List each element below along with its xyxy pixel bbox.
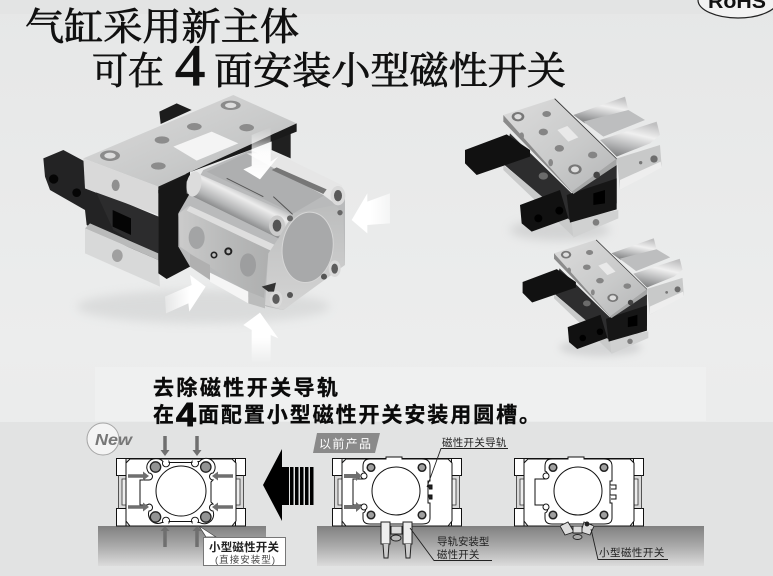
top plate [83, 95, 297, 215]
arrow: bottom [243, 313, 278, 363]
New badge: New [95, 432, 134, 449]
top strip [0, 0, 773, 14]
small switches in groove [560, 522, 594, 540]
black centre block [158, 172, 190, 279]
upper right gripper photo [465, 97, 662, 241]
gray arrows on previous diagrams [344, 471, 544, 512]
callout: small magnetic switch direct mount: (直接安装型) [215, 554, 275, 566]
upper surface [207, 152, 333, 213]
previous product tag [313, 433, 380, 453]
pale heading panel [95, 367, 706, 421]
RoHS badge [698, 0, 773, 18]
title: 可在 [92, 51, 164, 93]
lower plate [85, 223, 160, 287]
title: 4 [175, 33, 205, 98]
label: rail-mounted switch: 磁性开关 [437, 548, 480, 561]
label: rail-mounted switch [410, 528, 492, 561]
arrow: top [243, 127, 278, 179]
label: rail-mounted switch: 导轨安装型 [437, 535, 490, 548]
base silhouette [178, 150, 345, 310]
slot lines [227, 178, 293, 215]
left black jaw [43, 150, 158, 263]
rear black jaw [159, 103, 192, 124]
arrow: right [352, 193, 390, 233]
lower right gripper photo [523, 238, 684, 356]
title [25, 7, 566, 98]
heading text: 面配置小型磁性开关安装用圆槽。 [198, 404, 540, 427]
gray arrows on new diagram [128, 436, 233, 547]
ground blocks [98, 526, 704, 566]
title: 气缸采用新主体 [25, 7, 299, 49]
upper tube [187, 172, 293, 238]
bottom diagram band [0, 422, 773, 576]
previous product diagram: rail-mounted [332, 457, 462, 526]
arrow: lower left [165, 275, 206, 313]
label: small switch: 小型磁性开关 [599, 546, 665, 559]
rear end block [272, 131, 291, 158]
front face [265, 205, 345, 310]
callout: small magnetic switch direct mount [199, 526, 286, 566]
label: switch rail: 磁性开关导轨 [442, 436, 507, 449]
side block [178, 206, 275, 303]
heading text: 4 [176, 396, 197, 433]
callout: small magnetic switch direct mount: 小型磁性开关 [209, 540, 280, 554]
title: 面安装小型磁性开关 [214, 51, 566, 93]
New badge [87, 423, 134, 455]
lower rail [190, 254, 210, 280]
rail-mounted switches [381, 522, 412, 558]
label: small switch [591, 529, 668, 560]
cylinder body [178, 150, 345, 310]
heading text: 在 [153, 404, 174, 427]
big left arrow [263, 449, 314, 521]
previous product tag: 以前产品 [319, 436, 371, 451]
previous product diagram: small switch [514, 457, 644, 526]
heading text: 去除磁性开关导轨 [153, 376, 338, 400]
new product diagram [116, 458, 246, 526]
rear tube [247, 153, 345, 205]
main gripper photo with arrows [43, 95, 390, 363]
heading text [153, 376, 540, 433]
label: switch rail [427, 436, 508, 487]
